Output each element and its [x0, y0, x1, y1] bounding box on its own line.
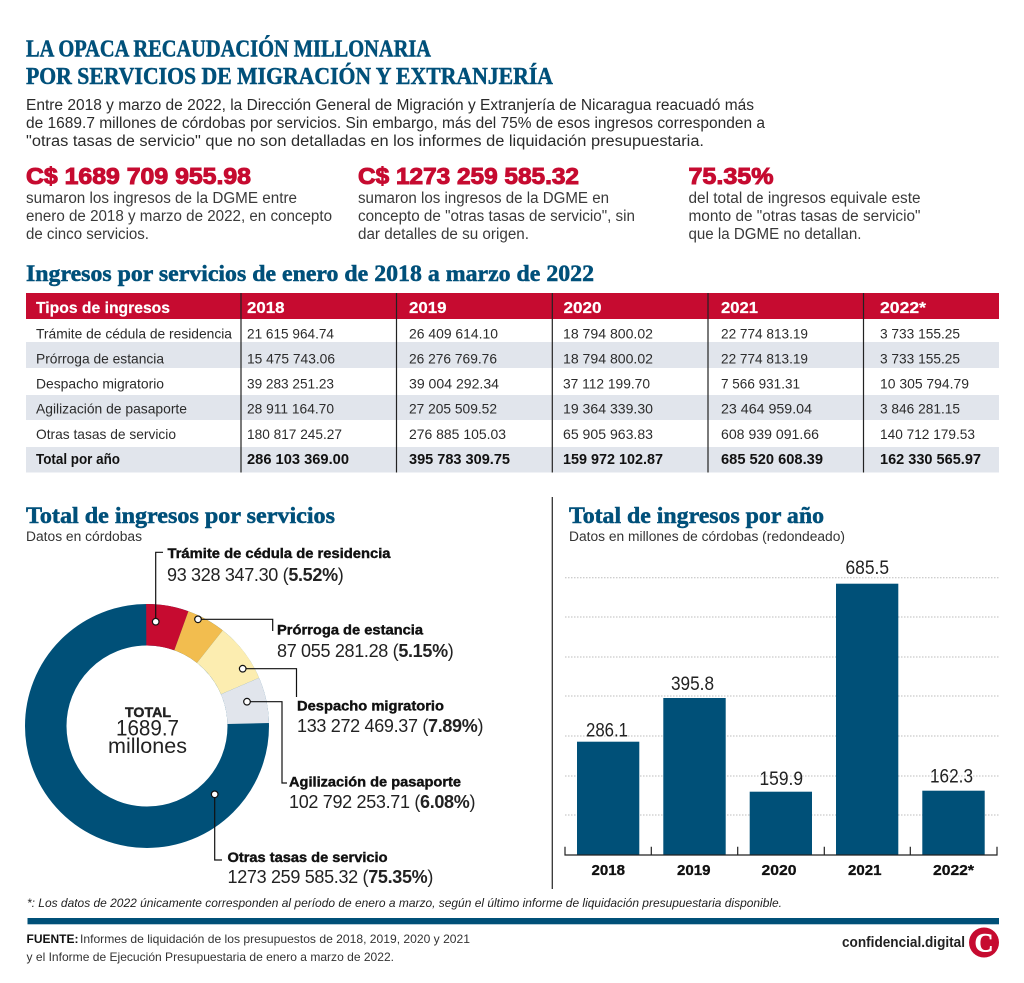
row: Otras tasas de servicio: Otras tasas de servicio: [36, 426, 176, 442]
row: Otras tasas de servicio: 65 905 963.83: [563, 426, 653, 442]
bar 2018: 2018: [592, 862, 625, 879]
bar 2020: 2020: [762, 862, 796, 879]
row: Despacho migratorio: [36, 376, 969, 392]
stat: percentage: que la DGME no detallan.: [688, 226, 862, 243]
label: Agilización de pasaporte: Agilización de pasaporte: [289, 774, 461, 790]
source: y el Informe de Ejecución Presupuestaria de enero a marzo de 2022.: [26, 950, 394, 964]
source: Informes de liquidación de los presupuestos de 2018, 2019, 2020 y 2021: [80, 932, 470, 946]
row: Otras tasas de servicio: [36, 426, 975, 442]
stat: other service fees: [358, 163, 635, 243]
stat: percentage: [688, 163, 920, 243]
bar 2021: 685.5: [846, 558, 889, 579]
row: Despacho migratorio: 39 004 292.34: [409, 376, 499, 392]
table header: 2018: [247, 300, 285, 317]
source: FUENTE:: [26, 932, 78, 946]
stat: other service fees: sumaron los ingresos de la DGME en: [358, 190, 609, 207]
row: Trámite de cédula de residencia: 18 794 800.02: [563, 326, 653, 342]
row: Total por año: [36, 452, 981, 468]
stat: other service fees: concepto de "otras tasas de servicio", sin: [358, 208, 635, 225]
row: Otras tasas de servicio: 180 817 245.27: [247, 426, 342, 442]
table header: 2022*: [880, 300, 927, 317]
stat: total income: sumaron los ingresos de la DGME entre: [26, 190, 297, 207]
heading: donut: Total de ingresos por servicios: [26, 503, 335, 528]
label: Prórroga de estancia: [277, 622, 453, 661]
label: Agilización de pasaporte: 102 792 253.71 (6.08%): [289, 792, 475, 812]
row: Trámite de cédula de residencia: 3 733 155.25: [880, 326, 960, 342]
bar 2019: [663, 674, 726, 879]
table header: 2020: [564, 300, 602, 317]
stat: other service fees: C$ 1273 259 585.32: [358, 163, 579, 189]
row: Total por año: 395 783 309.75: [409, 452, 510, 468]
row: Prórroga de estancia: 18 794 800.02: [563, 350, 653, 366]
bar 2018: 286.1: [586, 721, 628, 742]
stat: other service fees: dar detalles de su origen.: [358, 226, 529, 243]
stat: total income: enero de 2018 y marzo de 2022, en concepto: [26, 208, 332, 225]
bar 2019: 395.8: [671, 674, 714, 695]
intro text block: [26, 97, 765, 150]
row: Otras tasas de servicio: 608 939 091.66: [721, 426, 819, 442]
bar 2022: [922, 767, 985, 879]
donut chart: [46, 625, 248, 827]
title: LA OPACA RECAUDACIÓN MILLONARIA: [26, 36, 432, 62]
stat: total income: de cinco servicios.: [26, 226, 149, 243]
label: Otras tasas de servicio: [228, 849, 433, 887]
row: Agilización de pasaporte: 27 205 509.52: [409, 400, 497, 416]
bar 2021: [836, 558, 898, 879]
table header: 2019: [409, 300, 447, 317]
divider between charts: [551, 497, 553, 889]
label: Agilización de pasaporte: [289, 774, 475, 812]
row: Despacho migratorio: 7 566 931.31: [721, 376, 800, 392]
footer bar: [28, 918, 999, 924]
title: [26, 36, 554, 90]
heading: bars: Total de ingresos por año: [569, 503, 824, 528]
intro text block: de 1689.7 millones de córdobas por servicios. Sin embargo, más del 75% de esos ingresos corresponden a: [26, 115, 765, 132]
stat: percentage: 75.35%: [688, 163, 774, 189]
row: Agilización de pasaporte: [36, 400, 960, 416]
row: Total por año: 159 972 102.87: [563, 452, 663, 468]
row: Agilización de pasaporte: 19 364 339.30: [563, 400, 653, 416]
stat: percentage: del total de ingresos equivale este: [688, 190, 920, 207]
row: Despacho migratorio: Despacho migratorio: [36, 376, 164, 392]
donut center total: [108, 704, 187, 758]
label: Despacho migratorio: [297, 698, 483, 736]
table header: [36, 300, 927, 317]
bar 2019: 2019: [677, 862, 710, 879]
bar 2022: 2022*: [933, 862, 974, 879]
stat: total income: C$ 1689 709 955.98: [26, 163, 251, 189]
row: Otras tasas de servicio: 276 885 105.03: [409, 426, 506, 442]
row: Total por año: 286 103 369.00: [247, 452, 349, 468]
income table: [26, 293, 999, 472]
table header: 2021: [721, 300, 758, 317]
row: Trámite de cédula de residencia: 26 409 614.10: [409, 326, 498, 342]
row: Prórroga de estancia: 22 774 813.19: [721, 350, 808, 366]
label: Otras tasas de servicio: Otras tasas de servicio: [228, 849, 388, 865]
intro text block: Entre 2018 y marzo de 2022, la Dirección General de Migración y Extranjería de Nicaragua reacuadó más: [26, 97, 754, 114]
row: Prórroga de estancia: 15 475 743.06: [247, 350, 335, 366]
logo: confidencial.digital: confidencial.digital: [842, 935, 965, 951]
row: Total por año: Total por año: [36, 452, 120, 468]
bar 2020: [750, 769, 812, 879]
row: Otras tasas de servicio: 140 712 179.53: [880, 426, 975, 442]
row: Trámite de cédula de residencia: Trámite de cédula de residencia: [36, 326, 232, 342]
donut center total: TOTAL: [125, 704, 171, 720]
row: Trámite de cédula de residencia: 22 774 813.19: [721, 326, 808, 342]
row: Trámite de cédula de residencia: [36, 326, 960, 342]
row: Prórroga de estancia: 3 733 155.25: [880, 350, 960, 366]
row: Agilización de pasaporte: Agilización de pasaporte: [36, 400, 187, 416]
row: Agilización de pasaporte: 3 846 281.15: [880, 400, 960, 416]
intro text block: "otras tasas de servicio" que no son detalladas en los informes de liquidación presupuestaria.: [26, 133, 704, 150]
chart axis: [565, 847, 997, 855]
label: Trámite de cédula de residencia: Trámite de cédula de residencia: [168, 545, 391, 561]
subtitle: bars: Datos en millones de córdobas (redondeado): [569, 529, 845, 544]
panel: total by year: [565, 503, 999, 879]
row: Prórroga de estancia: Prórroga de estancia: [36, 350, 164, 366]
label: Despacho migratorio: 133 272 469.37 (7.89%): [297, 716, 483, 736]
row: Total por año: 162 330 565.97: [880, 452, 981, 468]
label: Trámite de cédula de residencia: 93 328 347.30 (5.52%): [167, 565, 343, 585]
heading: table: Ingresos por servicios de enero de 2018 a marzo de 2022: [26, 261, 594, 286]
row: Trámite de cédula de residencia: 21 615 964.74: [247, 326, 334, 342]
panel: total by service: [26, 503, 483, 887]
footnote: *: Los datos de 2022 únicamente corresponden al período de enero a marzo, según el último informe de liquidación presupuestaria disponible.: [27, 896, 782, 910]
logo: confidencial.digital: [842, 928, 999, 958]
stat: total income: [26, 163, 332, 243]
stat: percentage: monto de "otras tasas de servicio": [688, 208, 920, 225]
bar 2021: 2021: [848, 862, 882, 879]
label: Prórroga de estancia: 87 055 281.28 (5.15%): [277, 641, 453, 661]
bar chart: [577, 558, 985, 879]
donut center total: millones: [108, 735, 187, 758]
logo: confidencial.digital: C: [975, 928, 993, 958]
row: Despacho migratorio: 39 283 251.23: [247, 376, 334, 392]
subtitle: donut: Datos en córdobas: [26, 529, 142, 544]
row: Despacho migratorio: 10 305 794.79: [880, 376, 969, 392]
bar 2018: [577, 721, 639, 879]
leader lines: [152, 552, 296, 860]
title: POR SERVICIOS DE MIGRACIÓN Y EXTRANJERÍA: [26, 63, 554, 90]
row: Total por año: 685 520 608.39: [721, 452, 823, 468]
bar 2022: 162.3: [930, 767, 973, 788]
row: Prórroga de estancia: [36, 350, 960, 366]
table header: Tipos de ingresos: [36, 300, 170, 317]
label: Trámite de cédula de residencia: [167, 545, 391, 585]
label: Otras tasas de servicio: 1273 259 585.32 (75.35%): [228, 867, 433, 887]
bar 2020: 159.9: [760, 769, 803, 790]
row: Prórroga de estancia: 26 276 769.76: [409, 350, 497, 366]
row: Despacho migratorio: 37 112 199.70: [563, 376, 650, 392]
source: [26, 932, 470, 964]
row: Agilización de pasaporte: 28 911 164.70: [247, 400, 334, 416]
label: Despacho migratorio: Despacho migratorio: [297, 698, 444, 714]
donut center total: 1689.7: [116, 716, 179, 740]
label: Prórroga de estancia: Prórroga de estancia: [277, 622, 423, 638]
row: Agilización de pasaporte: 23 464 959.04: [721, 400, 812, 416]
